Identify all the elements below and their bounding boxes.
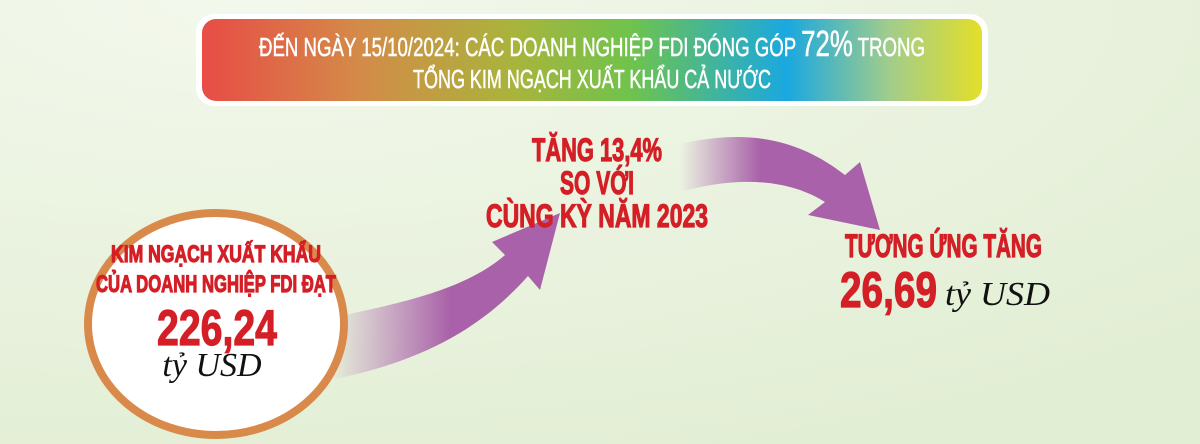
text: growth rate: TĂNG 13,4% (532, 132, 662, 168)
text: corresponding increase: 26,69 (840, 262, 937, 318)
text: corresponding increase (840, 228, 1050, 318)
arrow: rising (330, 213, 560, 380)
circle: export value: KIM NGẠCH XUẤT KHẨU (111, 240, 321, 268)
arrow: descending (680, 137, 880, 230)
text: corresponding increase: TƯƠNG ỨNG TĂNG (845, 228, 1042, 264)
circle: export value: tỷ USD (162, 347, 262, 384)
title banner: TỔNG KIM NGẠCH XUẤT KHẨU CẢ NƯỚC (413, 64, 771, 94)
title banner: ĐẾN NGÀY 15/10/2024: CÁC DOANH NGHIỆP FDI ĐÓNG GÓP 72% TRONG (259, 23, 925, 64)
text: corresponding increase: tỷ USD (945, 276, 1050, 313)
circle: export value: CỦA DOANH NGHIỆP FDI ĐẠT (96, 269, 336, 298)
text: growth rate: CÙNG KỲ NĂM 2023 (486, 198, 708, 234)
circle: export value: 226,24 (157, 300, 277, 356)
title banner (196, 14, 988, 106)
text: growth rate: SO VỚI (560, 165, 634, 201)
circle: export value (88, 213, 344, 435)
text: growth rate (486, 132, 708, 234)
